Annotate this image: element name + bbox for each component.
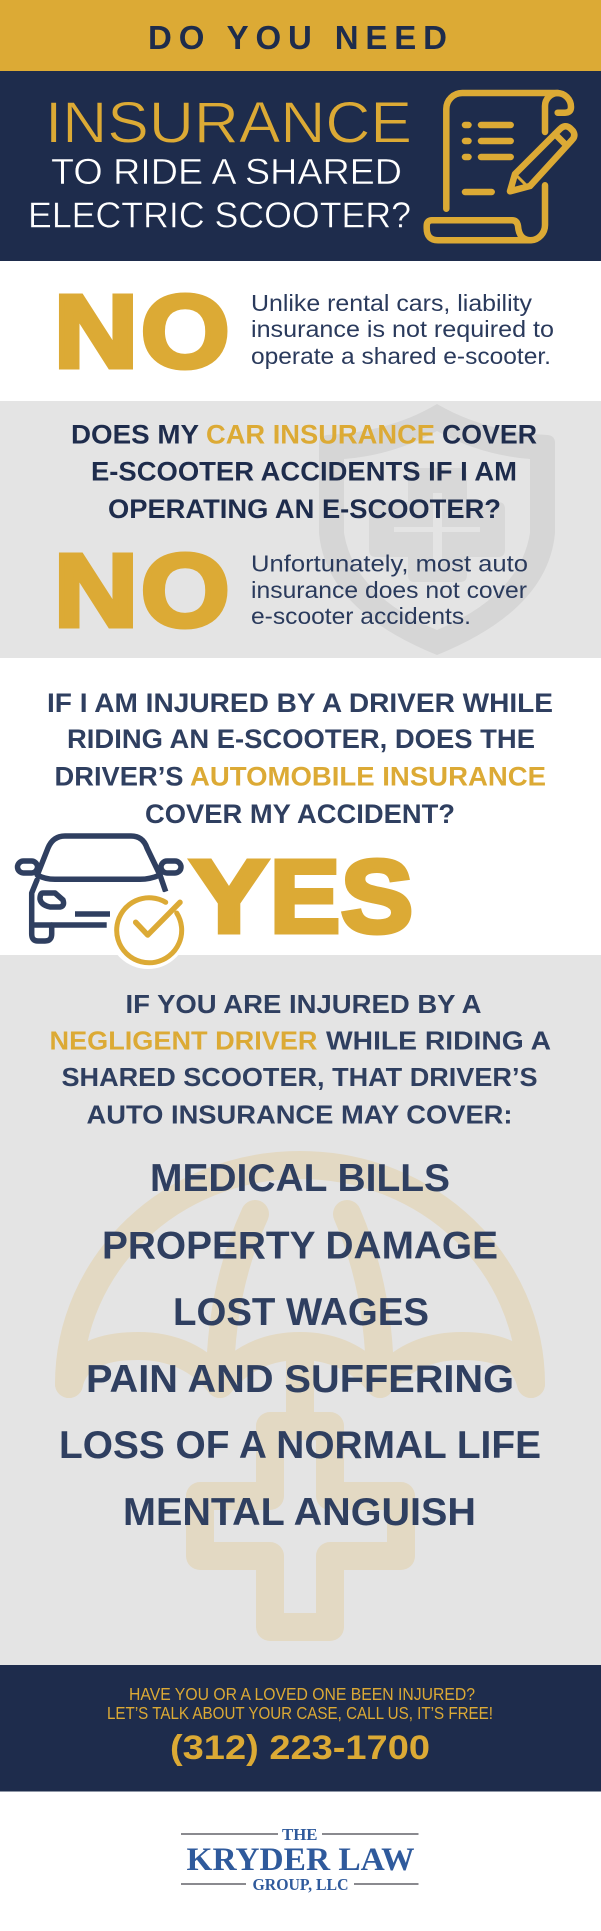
icon: umbrella and cross watermark [69,1165,531,1627]
text: liability explanation: operate a shared e-scooter. [251,343,551,369]
list: coverage items: LOST WAGES [173,1291,429,1334]
heading: driver question: RIDING AN E-SCOOTER, DOES THE [67,724,535,754]
answer: no: O [141,274,230,389]
heading: driver question: IF I AM INJURED BY A DRIVER WHILE [47,688,553,718]
heading: car insurance question: DOES MY [71,420,199,450]
list: coverage items: LOSS OF A NORMAL LIFE [59,1424,541,1467]
heading: do you need: DO YOU NEED [148,19,447,56]
panel: liability answer [54,274,554,389]
list: coverage items: PAIN AND SUFFERING [86,1358,514,1401]
answer: yes: Y [190,839,268,954]
panel: top banner [0,0,601,71]
text: auto insurance explanation: insurance does not cover [251,577,527,603]
heading: negligent driver: SHARED SCOOTER, THAT DRIVER’S [62,1062,538,1092]
heading: car insurance question: COVER [442,420,537,450]
heading: negligent driver: WHILE RIDING A [326,1026,551,1056]
heading: car insurance question: E-SCOOTER ACCIDENTS IF I AM [91,457,517,487]
text: auto insurance explanation: e-scooter accidents. [251,603,471,629]
heading: negligent driver: NEGLIGENT DRIVER [50,1026,318,1056]
answer: no [54,274,230,389]
title: to ride a shared: TO RIDE A SHARED [51,151,402,192]
heading: negligent driver [50,989,551,1130]
heading: car insurance question: CAR INSURANCE [206,420,435,450]
text: injured prompt: HAVE YOU OR A LOVED ONE BEEN INJURED? [129,1684,475,1704]
icon: car with check mark [18,836,188,969]
answer: yes: S [341,839,413,954]
answer: no: N [54,533,138,648]
list: coverage items: MEDICAL BILLS [150,1157,450,1200]
heading: negligent driver: AUTO INSURANCE MAY COVER: [86,1100,512,1130]
answer: no: O [141,533,230,648]
text: auto insurance explanation [251,550,528,629]
phone number: (312) 223-1700 [170,1729,430,1767]
text: injured prompt [107,1684,493,1723]
text: liability explanation: Unlike rental cars, liability [251,290,533,316]
answer: yes: E [270,839,340,954]
heading: car insurance question [71,420,537,524]
panel: title [0,71,601,261]
panel: call to action footer [0,1665,601,1792]
icon: document and pencil [427,93,574,240]
heading: driver question: COVER MY ACCIDENT? [145,799,455,829]
logo: the kryder law group: THE [282,1825,318,1844]
text: liability explanation: insurance is not required to [251,316,554,342]
heading: car insurance question: OPERATING AN E-SCOOTER? [108,494,501,524]
text: liability explanation [251,290,554,369]
title: insurance: INSURANCE [45,90,412,156]
logo: the kryder law group: KRYDER LAW [186,1842,414,1878]
list: coverage items [59,1157,541,1534]
title: electric scooter: ELECTRIC SCOOTER? [28,194,411,236]
panel: driver automobile insurance question [47,688,553,954]
list: coverage items: MENTAL ANGUISH [123,1491,476,1534]
text: auto insurance explanation: Unfortunately, most auto [251,550,528,576]
heading: driver question [47,688,553,829]
heading: negligent driver: IF YOU ARE INJURED BY A [126,989,482,1019]
answer: no: N [54,274,138,389]
heading: driver question: AUTOMOBILE INSURANCE [190,762,546,792]
panel: coverage list [0,955,601,1665]
answer: no [54,533,230,648]
heading: driver question: DRIVER’S [54,762,184,792]
answer: yes [190,839,413,954]
icon: shield watermark [319,404,555,655]
list: coverage items: PROPERTY DAMAGE [102,1224,498,1268]
text: injured prompt: LET’S TALK ABOUT YOUR CASE, CALL US, IT’S FREE! [107,1703,493,1723]
logo: the kryder law group [181,1825,418,1894]
panel: car insurance question [0,401,601,658]
logo: the kryder law group: GROUP, LLC [252,1875,348,1894]
